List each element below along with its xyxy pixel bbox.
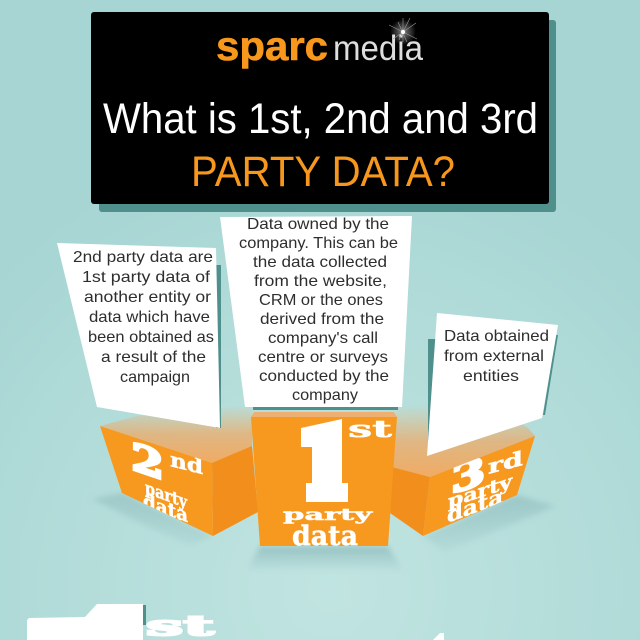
card text: entities [463, 368, 519, 385]
card shadow [216, 265, 221, 428]
logo: sparcmedia [216, 18, 424, 69]
card: 2nd party description [57, 243, 221, 428]
card text: the data collected [253, 254, 387, 271]
card text: company [292, 387, 358, 404]
suffix nd: nd [170, 447, 203, 479]
card panel [57, 243, 220, 428]
word data: data [447, 484, 503, 528]
box: 3rd party data [390, 405, 535, 536]
box: 2nd party data [100, 405, 258, 536]
card text: Data owned by the [247, 216, 389, 233]
word data: data [292, 521, 358, 552]
card text: from the website, [254, 273, 387, 290]
box front [251, 417, 397, 546]
heading shadow [143, 605, 146, 625]
card text: 1st party data of [82, 269, 211, 286]
heading block, cropped by the frame [27, 604, 143, 640]
box top [251, 412, 397, 417]
card shadow right [543, 335, 558, 415]
numeral 1 [301, 419, 348, 502]
numeral 3: 3 [451, 447, 485, 503]
card: 1st party description [220, 216, 412, 410]
card text [73, 249, 214, 386]
card text: company's call [268, 330, 378, 347]
card text: campaign [120, 369, 190, 386]
card shadow [428, 339, 436, 452]
numeral 1: 1 [301, 406, 352, 527]
box side [390, 467, 430, 536]
card panel [427, 313, 558, 456]
box label [283, 419, 392, 546]
next section heading, cropped [27, 604, 444, 640]
suffix rd: rd [488, 446, 523, 479]
floor shadow: 3rd box [423, 495, 556, 552]
card text: another entity or [84, 289, 212, 306]
floor shadow: 2nd box [92, 493, 213, 546]
card shadow [253, 406, 398, 410]
card: 3rd party description [427, 313, 558, 456]
title line 1: What is 1st, 2nd and 3rd [103, 95, 538, 143]
card text: centre or surveys [258, 349, 388, 366]
box front [423, 436, 535, 536]
card text: derived from the [260, 311, 384, 328]
card text: data which have [89, 309, 210, 326]
box front [100, 426, 213, 536]
banner shadow [99, 20, 556, 212]
word data: data [143, 489, 188, 527]
box side [212, 446, 258, 536]
logo word: sparc: sparc [216, 23, 328, 69]
box: 1st party data [251, 406, 397, 552]
next block, cropped by the frame [433, 633, 444, 640]
card text: company. This can be [239, 235, 398, 252]
card text [444, 328, 549, 385]
box label [132, 442, 203, 522]
box top [100, 405, 252, 463]
box label [448, 450, 523, 522]
card text: from external [444, 348, 544, 365]
word party: party [448, 471, 514, 513]
word party: party [145, 478, 188, 513]
numeral 2: 2 [131, 434, 164, 490]
card text: a result of the [101, 349, 206, 366]
card text [239, 216, 398, 404]
title line 2: PARTY DATA? [191, 148, 455, 196]
floor shadow: 1st box [246, 546, 404, 572]
box top [392, 405, 535, 477]
card panel [220, 216, 412, 407]
word party: party [283, 505, 373, 524]
card text: CRM or the ones [259, 292, 383, 309]
icon: logo sparkle [389, 18, 417, 45]
card text: Data obtained [444, 328, 549, 345]
banner panel [91, 12, 549, 204]
header banner [91, 12, 556, 212]
logo word: media: media [333, 29, 424, 68]
card text: 2nd party data are [73, 249, 213, 266]
card text: conducted by the [259, 368, 389, 385]
card text: been obtained as [88, 329, 214, 346]
suffix st: st [348, 416, 393, 443]
